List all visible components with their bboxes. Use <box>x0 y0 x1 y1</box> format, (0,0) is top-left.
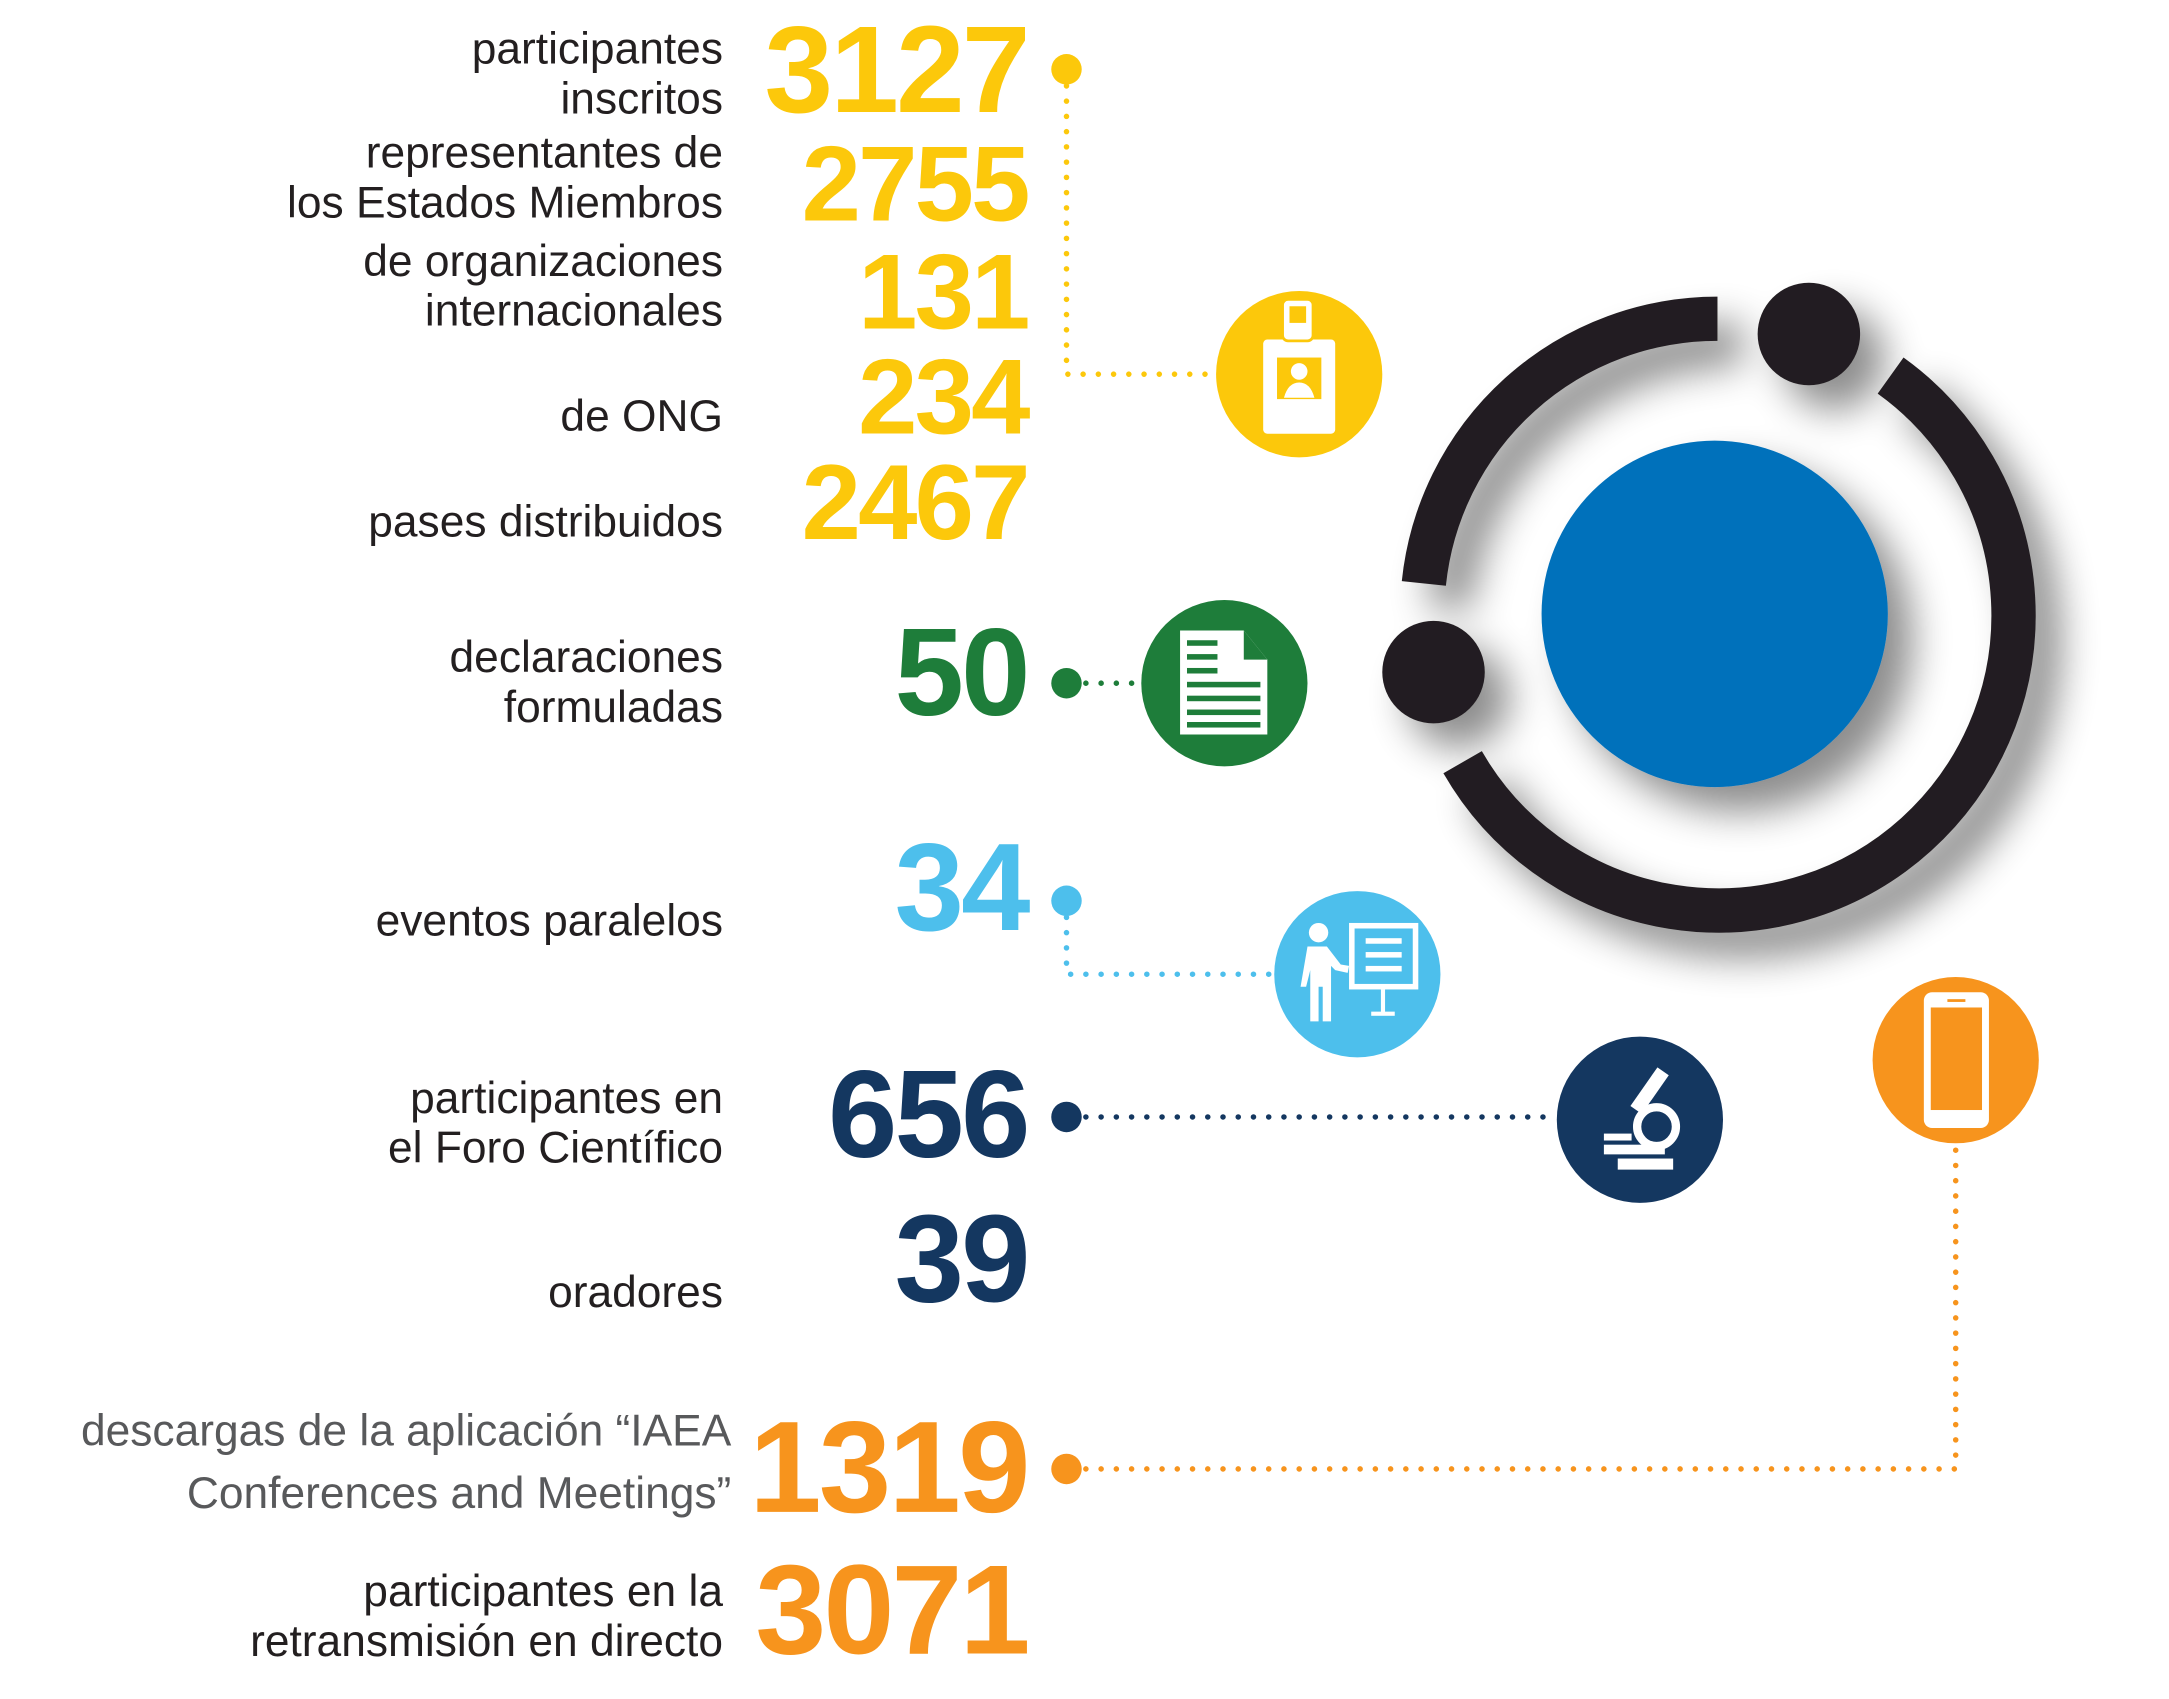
stat: de ONG <box>560 337 1030 457</box>
central ring graphic <box>1382 283 2014 910</box>
connector: orange <box>1051 1145 1956 1484</box>
stat: participantes inscritos: inscritos <box>560 75 723 124</box>
stat: oradores <box>548 1189 1028 1328</box>
stat: oradores: 39 <box>895 1189 1028 1328</box>
stat: declaraciones formuladas: declaraciones <box>450 633 723 682</box>
stat: eventos paralelos: eventos paralelos <box>376 896 723 945</box>
stat: descargas app: Conferences and Meetings” <box>187 1469 731 1518</box>
stat: organizaciones internacionales <box>363 231 1028 351</box>
connector: yellow <box>1051 54 1216 374</box>
stat: representantes de los Estados Miembros: representantes de <box>366 129 723 178</box>
stat: organizaciones internacionales: de organizaciones <box>363 237 723 286</box>
stat: retransmisión en directo: retransmisión en directo <box>250 1617 723 1666</box>
icon: presenter <box>1274 891 1440 1057</box>
stat: retransmisión en directo: participantes en la <box>363 1567 723 1616</box>
stat: eventos paralelos: 34 <box>895 818 1030 957</box>
stat: declaraciones formuladas <box>450 603 1028 742</box>
stat: organizaciones internacionales: internacionales <box>425 287 723 336</box>
stat: eventos paralelos <box>376 818 1030 957</box>
stat: oradores: oradores <box>548 1268 723 1317</box>
connector: green <box>1051 668 1141 698</box>
stat: declaraciones formuladas: 50 <box>895 603 1028 742</box>
stat: organizaciones internacionales: 131 <box>858 231 1028 351</box>
stat: de ONG: 234 <box>858 337 1030 457</box>
stat: representantes de los Estados Miembros <box>287 123 1028 243</box>
stat: retransmisión en directo: 3071 <box>755 1539 1028 1681</box>
stat: pases distribuidos: 2467 <box>802 442 1028 562</box>
stat: representantes de los Estados Miembros: 2755 <box>802 123 1028 243</box>
stat: representantes de los Estados Miembros: los Estados Miembros <box>287 179 723 228</box>
stat: de ONG: de ONG <box>560 392 723 441</box>
icon: microscope <box>1557 1037 1723 1203</box>
stat: pases distribuidos <box>368 442 1028 562</box>
stat: participantes inscritos <box>472 1 1028 139</box>
icon: badge <box>1216 291 1382 457</box>
stat: pases distribuidos: pases distribuidos <box>368 497 723 546</box>
stat: participantes inscritos: participantes <box>472 25 723 74</box>
stat: declaraciones formuladas: formuladas <box>504 683 723 732</box>
stat: Foro Científico: participantes en <box>410 1074 723 1123</box>
stat: descargas app: descargas de la aplicación “IAEA <box>81 1406 732 1455</box>
connector: navy <box>1051 1102 1554 1132</box>
stat: Foro Científico <box>388 1045 1028 1184</box>
stat: descargas app <box>81 1394 1028 1540</box>
stat: retransmisión en directo <box>250 1539 1028 1681</box>
connector: light blue <box>1051 886 1274 974</box>
icon: smartphone <box>1873 977 2039 1143</box>
stat: Foro Científico: 656 <box>828 1045 1028 1184</box>
icon: document <box>1141 600 1307 766</box>
stat: participantes inscritos: 3127 <box>765 1 1028 139</box>
stat: Foro Científico: el Foro Científico <box>388 1124 723 1173</box>
stat: descargas app: 1319 <box>749 1394 1028 1540</box>
